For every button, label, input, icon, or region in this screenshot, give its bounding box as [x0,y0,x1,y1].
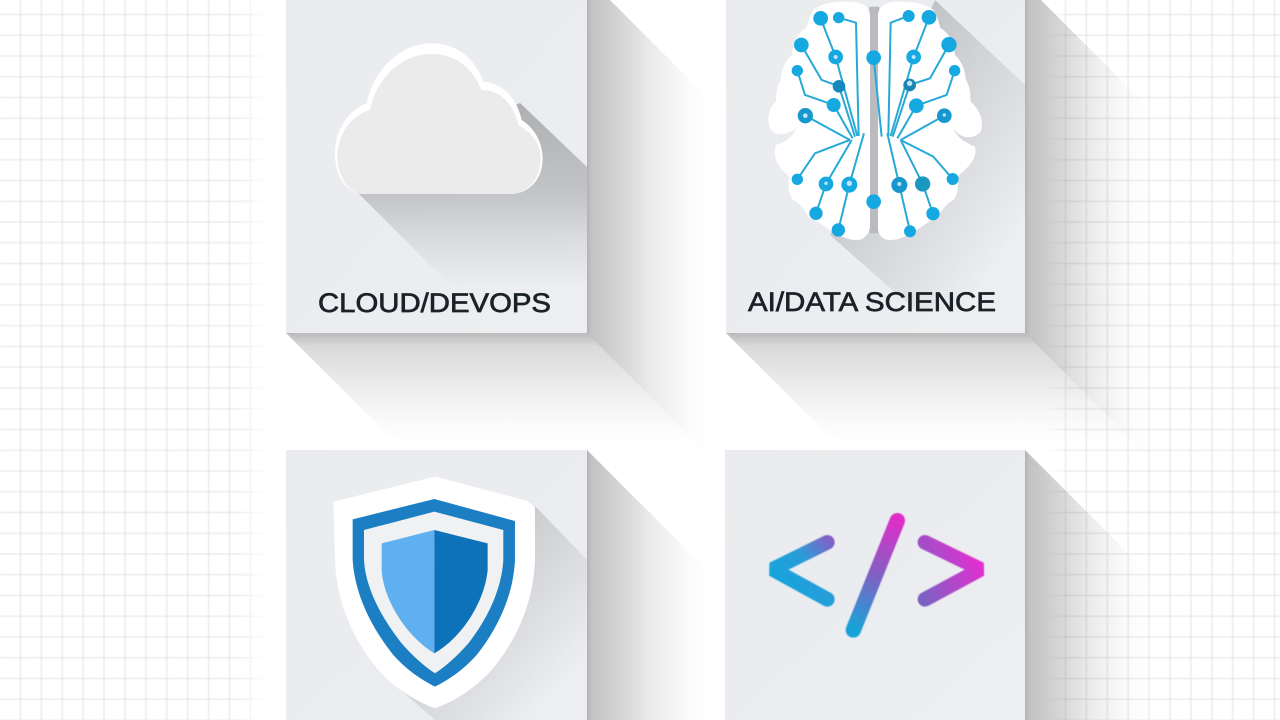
card: ai/data science [726,0,1025,333]
card: code [725,450,1025,720]
card: security [286,450,587,720]
circuit traces [797,16,955,231]
icon: code brackets [773,521,981,630]
icon: shield [333,477,535,708]
circuit nodes [792,10,960,237]
icon shadow: shield [395,505,587,720]
panel: code [725,450,1153,720]
icon: brain [768,2,982,240]
panel: cloud/devops [286,0,678,424]
icon shadow: brain [830,0,1025,310]
icon shadow: cloud [358,103,587,264]
card: cloud/devops [286,0,587,333]
label: cloud/devops: CLOUD/DEVOPS [318,288,551,318]
panel: ai/data science [726,0,1116,424]
panel: security [286,450,715,720]
icon: cloud [335,43,543,194]
label: ai/data science: AI/DATA SCIENCE [748,287,996,317]
